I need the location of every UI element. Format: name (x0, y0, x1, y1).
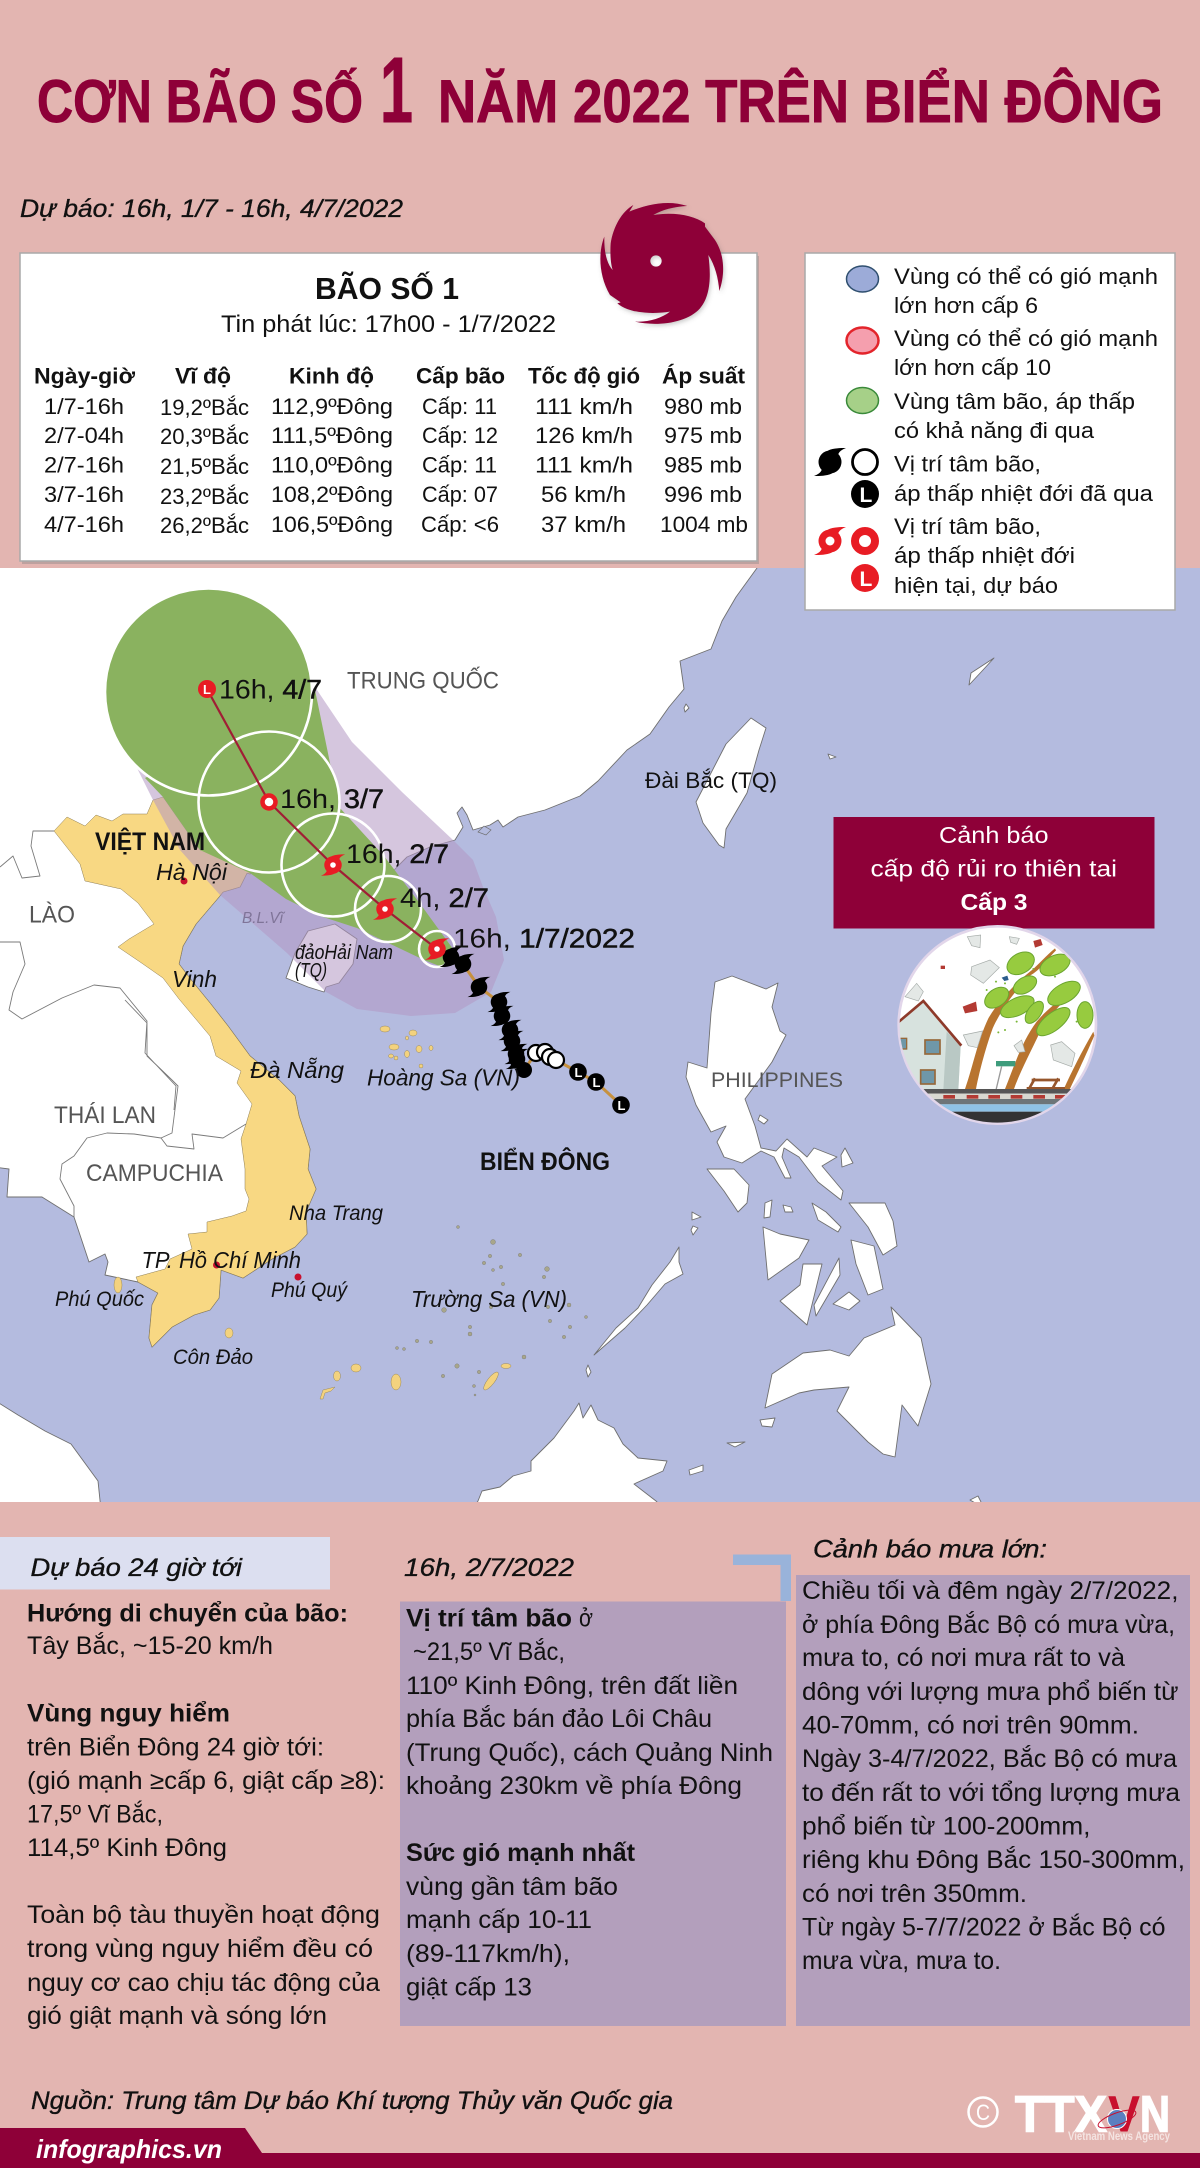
source line: Nguồn: Trung tâm Dự báo Khí tượng Thủy văn Quốc gia (31, 2087, 673, 2115)
table heading: BÃO SỐ 1 (315, 270, 459, 306)
country labels: CAMPUCHIA (86, 1160, 223, 1187)
icon: cyclone (600, 203, 723, 324)
Palawan (594, 1247, 683, 1355)
panel: storm position and wind (400, 1602, 786, 2026)
table rows: 37 km/h (541, 512, 626, 537)
panel: heavy rain warning: mưa to, có nơi mưa rất to và (802, 1644, 1125, 1672)
logo: TTXVN: V (1108, 2086, 1140, 2142)
table rows: 3/7-16h (44, 482, 124, 507)
place labels: Hà Nội (156, 859, 228, 885)
place labels: (TQ) (295, 960, 327, 982)
table rows: 111 km/h (535, 452, 633, 478)
panel: heavy rain warning: dông với lượng mưa phổ biến từ (802, 1678, 1178, 1706)
past storm positions (439, 947, 630, 1114)
legend text: past positions: Vị trí tâm bão, (894, 452, 1041, 476)
place labels: Đài Bắc (TQ) (645, 768, 777, 793)
table rows: 975 mb (664, 423, 742, 448)
text block: 24 hour forecast: Hướng di chuyển của bão: (27, 1600, 348, 1628)
legend text: current and forecast positions: Vị trí tâm bão, (894, 514, 1041, 539)
text block: 24 hour forecast: trên Biển Đông 24 giờ tới: (27, 1734, 324, 1762)
table header row: Tốc độ gió (528, 364, 640, 388)
Philippines islands (686, 976, 931, 1475)
logo: TTXVN (968, 2086, 1171, 2143)
table rows: 1004 mb (660, 512, 748, 537)
table header row: Kinh độ (289, 364, 374, 388)
table header row: Áp suất (662, 364, 746, 388)
place labels: B.L.Vĩ (242, 910, 285, 927)
past storm positions: L (574, 1065, 582, 1080)
text block: 24 hour forecast: Vùng nguy hiểm (27, 1700, 230, 1728)
table rows: Cấp: 11 (422, 394, 497, 419)
legend text: level 6: Vùng có thể có gió mạnh (894, 264, 1158, 289)
place labels: TP. Hồ Chí Minh (142, 1247, 301, 1273)
text block: 24 hour forecast: gió giật mạnh và sóng lớn (27, 2002, 327, 2030)
table rows: Cấp: <6 (421, 512, 499, 537)
legend icon: storm centre zone (846, 388, 878, 414)
table header row (34, 364, 746, 388)
panel: heavy rain warning (796, 1575, 1190, 2026)
track time labels: 4h, 2/7 (400, 883, 489, 913)
legend icon: past positions: L (860, 484, 872, 507)
footer bar: infographics.vn (36, 2134, 222, 2164)
text block: 24 hour forecast: (gió mạnh ≥cấp 6, giật cấp ≥8): (27, 1767, 385, 1795)
sea (0, 568, 1200, 1502)
panel: heavy rain warning: to đến rất to với tổng lượng mưa (802, 1779, 1180, 1807)
logo: TTXVN: C (976, 2100, 990, 2125)
panel: disaster risk warning: Cảnh báo (939, 822, 1048, 848)
track time labels: 16h, 1/7/2022 (453, 924, 635, 954)
place labels (55, 768, 777, 1369)
legend text: storm centre zone: Vùng tâm bão, áp thấp (894, 389, 1135, 414)
country borders (0, 831, 246, 1217)
legend text: level 6: lớn hơn cấp 6 (894, 293, 1038, 318)
table rows: Cấp: 12 (422, 423, 498, 448)
mainland Asia (0, 560, 762, 1347)
past track line (466, 970, 616, 1100)
table rows: 20,3ºBắc (160, 424, 249, 449)
place labels: Phú Quốc (55, 1288, 144, 1311)
legend text: current and forecast positions (894, 514, 1075, 598)
legend text: past positions: áp thấp nhiệt đới đã qua (894, 481, 1154, 506)
logo: TTXVN: Vietnam News Agency (1068, 2131, 1171, 2143)
table rows: 996 mb (664, 482, 742, 507)
table rows: 21,5ºBắc (160, 454, 249, 479)
track time labels: 16h, 4/7 (219, 674, 322, 704)
table rows: 108,2ºĐông (271, 482, 393, 507)
panel: heavy rain warning: Chiều tối và đêm ngày 2/7/2022, (802, 1577, 1178, 1605)
text block: 24 hour forecast: Tây Bắc, ~15-20 km/h (27, 1631, 273, 1660)
place labels: Hoàng Sa (VN) (367, 1064, 520, 1090)
Hainan island (286, 924, 357, 992)
forecast track line (207, 689, 437, 949)
legend text: current and forecast positions: hiện tại, dự báo (894, 573, 1058, 598)
table rows: 112,9ºĐông (271, 394, 393, 419)
text block: 24 hour forecast: Toàn bộ tàu thuyền hoạt động (27, 1901, 380, 1929)
legend icon: current and forecast positions (814, 527, 879, 592)
issue time: Tin phát lúc: 17h00 - 1/7/2022 (221, 311, 556, 338)
panel: storm position and wind: 110º Kinh Đông, trên đất liền (406, 1672, 738, 1700)
place labels: Nha Trang (289, 1202, 383, 1225)
panel: heavy rain warning: ở phía Đông Bắc Bộ có mưa vừa, (802, 1610, 1175, 1639)
panel: storm position and wind: ~21,5º Vĩ Bắc, (413, 1637, 565, 1666)
forecast storm positions (198, 680, 449, 960)
title (37, 38, 1163, 142)
place labels: Đà Nẵng (250, 1056, 344, 1083)
text block: 24 hour forecast: nguy cơ cao chịu tác động của (27, 1969, 380, 1997)
table rows: 110,0ºĐông (271, 452, 393, 478)
heading: 16h 2/7/2022: 16h, 2/7/2022 (404, 1554, 574, 1582)
table rows: 23,2ºBắc (160, 484, 249, 509)
map (0, 560, 1200, 1510)
panel: storm position and wind: khoảng 230km về phía Đông (406, 1772, 742, 1800)
title: CƠN BÃO SỐ (37, 68, 363, 135)
country labels: BIỂN ĐÔNG (480, 1146, 610, 1176)
panel: heavy rain warning: có nơi trên 350mm. (802, 1880, 1027, 1908)
track time labels: 16h, 2/7 (346, 839, 449, 869)
text block: 24 hour forecast: 17,5º Vĩ Bắc, (27, 1800, 163, 1828)
panel: disaster risk warning (834, 817, 1154, 928)
storm centre zone (105, 588, 453, 967)
panel: storm position and wind: ở (579, 1604, 593, 1632)
panel: storm data table (20, 253, 759, 564)
country labels: LÀO (29, 902, 75, 928)
legend icon: current and forecast positions: L (860, 568, 872, 591)
city dots (180, 878, 302, 1280)
table header row: Ngày-giờ (34, 364, 135, 388)
Borneo (472, 1403, 667, 1510)
legend text: storm centre zone (894, 389, 1135, 443)
forecast radius circles (105, 588, 455, 967)
country labels: VIỆT NAM (95, 826, 205, 856)
panel: storm position and wind: vùng gần tâm bão (406, 1873, 618, 1901)
table rows: 980 mb (664, 394, 742, 419)
table rows: 56 km/h (541, 482, 626, 507)
legend text: level 10 (894, 326, 1158, 380)
legend text: current and forecast positions: áp thấp nhiệt đới (894, 543, 1075, 568)
panel: heavy rain warning: mưa vừa, mưa to. (802, 1947, 1001, 1975)
panel: heavy rain warning: Ngày 3-4/7/2022, Bắc Bộ có mưa (802, 1744, 1177, 1773)
place labels: đảoHải Nam (295, 942, 393, 964)
past storm positions: L (618, 1098, 626, 1113)
north-east islands (586, 658, 994, 1508)
heading: 24 hour forecast: Dự báo 24 giờ tới (30, 1554, 244, 1582)
table rows: 2/7-04h (44, 423, 124, 448)
table rows (44, 394, 748, 538)
track time labels (219, 674, 635, 954)
past storm positions: L (592, 1075, 600, 1090)
legend icon: past positions (814, 448, 879, 508)
country labels: THÁI LAN (54, 1102, 156, 1129)
legend text: level 10: Vùng có thể có gió mạnh (894, 326, 1158, 351)
text block: 24 hour forecast: 114,5º Kinh Đông (27, 1834, 227, 1862)
strong wind risk zone (137, 687, 504, 1016)
panel: heavy rain warning: 40-70mm, có nơi trên 90mm. (802, 1712, 1139, 1740)
Paracel islands (380, 1026, 433, 1068)
forecast period subtitle: Dự báo: 16h, 1/7 - 16h, 4/7/2022 (20, 195, 403, 223)
table rows: 19,2ºBắc (160, 395, 249, 420)
panel: heavy rain warning: Từ ngày 5-7/7/2022 ở Bắc Bộ có (802, 1912, 1166, 1942)
country labels (29, 666, 843, 1187)
table rows: 4/7-16h (44, 512, 124, 537)
table rows: Cấp: 11 (422, 452, 497, 478)
table rows: 2/7-16h (44, 452, 124, 478)
panel: storm position and wind: (Trung Quốc), cách Quảng Ninh (406, 1739, 773, 1767)
table rows: 126 km/h (535, 423, 633, 448)
panel: heavy rain warning: riêng khu Đông Bắc 150-300mm, (802, 1845, 1185, 1874)
panel: storm position and wind: giật cấp 13 (406, 1974, 532, 2002)
table rows: Cấp: 07 (422, 482, 498, 507)
Spratly islands and Phu Quoc, Con Dao (114, 1226, 588, 1399)
logo: TTXVN: TTX (1015, 2086, 1107, 2142)
place labels: Trường Sa (VN) (411, 1286, 567, 1312)
place labels: Côn Đảo (173, 1346, 253, 1369)
corner accent (733, 1554, 791, 1601)
legend text: level 6 (894, 264, 1158, 318)
Taiwan (696, 718, 766, 848)
lagoon on China coast (478, 826, 491, 835)
panel: storm position and wind: (89-117km/h), (406, 1940, 570, 1968)
heading: 24 hour forecast (0, 1537, 330, 1590)
panel: legend (805, 253, 1175, 610)
text block: 24 hour forecast: trong vùng nguy hiểm đều có (27, 1935, 373, 1963)
country labels: PHILIPPINES (711, 1069, 843, 1092)
heading: heavy rain warning: Cảnh báo mưa lớn: (813, 1536, 1047, 1564)
legend text: level 10: lớn hơn cấp 10 (894, 355, 1051, 380)
footer bar (0, 2128, 1200, 2168)
text block: 24 hour forecast (27, 1600, 385, 2030)
legend text: past positions (894, 452, 1154, 506)
table rows: 111,5ºĐông (271, 423, 393, 448)
legend text: storm centre zone: có khả năng đi qua (894, 418, 1095, 443)
legend icon: strong wind level 10 (846, 328, 878, 354)
table header row: Cấp bão (416, 364, 505, 388)
panel: disaster risk warning: Cấp 3 (960, 889, 1028, 915)
panel: disaster risk warning: cấp độ rủi ro thiên tai (870, 856, 1117, 882)
title: 1 (380, 38, 413, 142)
table rows: 1/7-16h (44, 394, 124, 419)
legend icon: strong wind level 6 (846, 266, 878, 292)
forecast storm positions: L (203, 682, 211, 697)
place labels: Phú Quý (271, 1279, 348, 1302)
panel: storm position and wind: mạnh cấp 10-11 (406, 1906, 592, 1934)
table header row: Vĩ độ (175, 364, 231, 388)
logo: TTXVN: N (1140, 2086, 1170, 2142)
table rows: 26,2ºBắc (160, 513, 249, 538)
panel: storm position and wind: phía Bắc bán đảo Lôi Châu (406, 1704, 712, 1733)
place labels: Vinh (172, 966, 217, 992)
table rows: 985 mb (664, 452, 742, 478)
track time labels: 16h, 3/7 (280, 784, 384, 814)
table rows: 106,5ºĐông (271, 512, 393, 537)
panel: heavy rain warning: phổ biến từ 100-200mm, (802, 1812, 1090, 1840)
Vietnam (54, 797, 316, 1347)
Malay peninsula (0, 1400, 101, 1510)
illustration: storm blowing house and trees (890, 926, 1103, 1125)
panel: storm position and wind: Sức gió mạnh nhất (406, 1839, 636, 1867)
table rows: 111 km/h (535, 394, 633, 419)
panel: storm position and wind: Vị trí tâm bão (406, 1604, 572, 1632)
country labels: TRUNG QUỐC (347, 666, 499, 694)
